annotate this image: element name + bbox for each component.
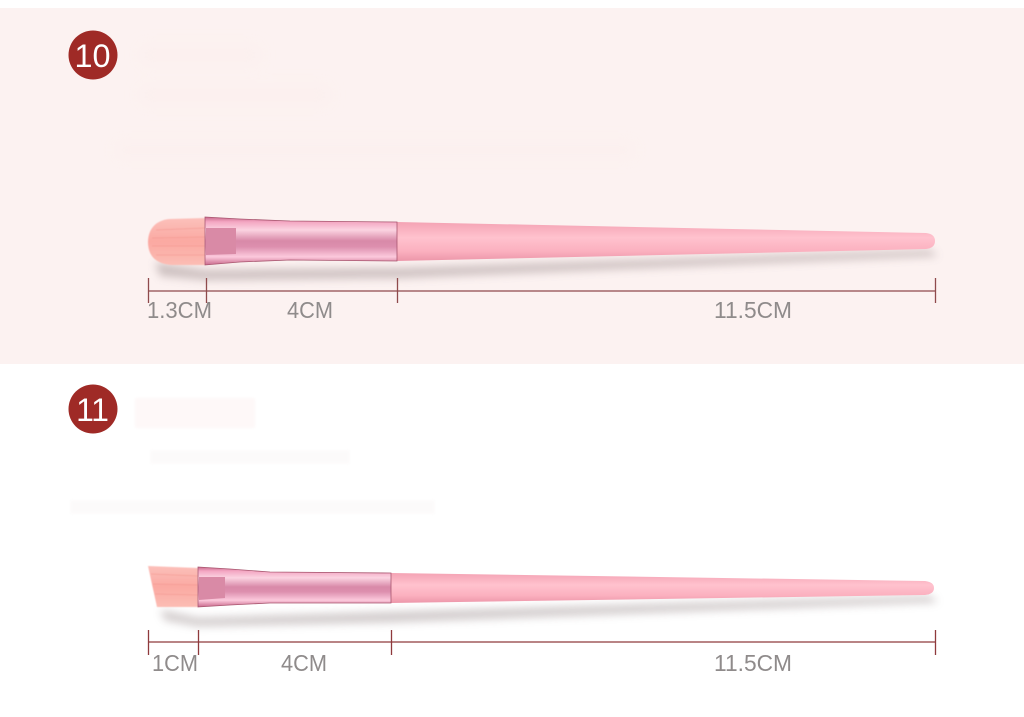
number badge 11 — [68, 384, 118, 434]
ferrule crimp — [199, 577, 225, 600]
brush shadow — [155, 250, 938, 280]
number badge 11: 1 — [76, 392, 94, 428]
dimension labels 10 — [147, 297, 792, 323]
dimension labels 11: 4CM — [281, 650, 327, 676]
brush 11 — [148, 566, 938, 626]
brush shadow — [160, 596, 938, 626]
ferrule crimp — [206, 228, 236, 255]
bristles — [148, 218, 205, 265]
dimension labels 10: 4CM — [287, 297, 333, 323]
panel: brush 10 background — [0, 8, 1024, 364]
dimension line 11 — [148, 630, 936, 655]
faded blurred text area: brush 10 — [115, 45, 635, 158]
ferrule — [198, 567, 391, 607]
dimension labels 10: 1.3CM — [147, 297, 212, 323]
number badge 10: 10 — [74, 38, 110, 74]
dimension labels 11: 1CM — [152, 650, 198, 676]
faded blurred text area: brush 11 — [70, 398, 435, 514]
number badge 11: 1 — [91, 392, 109, 428]
brush 10 — [148, 217, 938, 280]
bristles — [148, 566, 198, 607]
dimension labels 11 — [152, 650, 792, 676]
ferrule — [205, 217, 397, 265]
dimension labels 10: 11.5CM — [714, 297, 792, 323]
dimension line 10 — [148, 278, 936, 303]
number badge 10 — [68, 30, 118, 80]
dimension labels 11: 11.5CM — [714, 650, 792, 676]
handle — [397, 222, 935, 261]
handle — [391, 573, 934, 603]
